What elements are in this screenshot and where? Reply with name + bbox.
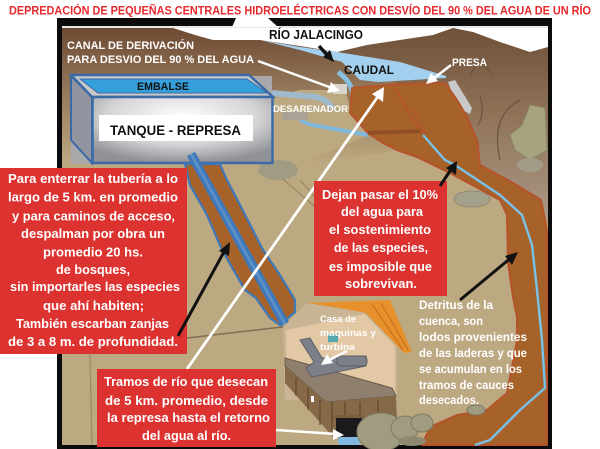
arrow: canal (258, 61, 340, 93)
label: casa de maquinas (320, 314, 376, 352)
label: canal de derivacion (67, 39, 254, 66)
embalse label: EMBALSE (137, 81, 189, 93)
callout: trench and deforestation: promedio 20 hs. (43, 246, 143, 260)
label: rio jalacingo: RÍO JALACINGO (269, 27, 363, 42)
label: canal de derivacion: CANAL DE DERIVACIÓN (67, 39, 194, 52)
text: detritus: de las laderas y que (419, 348, 527, 360)
pipe: brown trench and penstock (185, 154, 295, 325)
callout: 10 percent water: es imposible que (329, 260, 432, 274)
powerhouse (283, 300, 485, 449)
arrow: presa (426, 65, 451, 84)
label: casa de maquinas: maquinas y (320, 328, 376, 338)
text: detritus: cuenca, son (419, 316, 483, 328)
arrow: to detritus channel (460, 252, 518, 300)
river water: caudal (260, 40, 446, 82)
arrow: to thin water (440, 161, 457, 186)
arrow: black to trench (178, 242, 230, 336)
callout: 10 percent water: Dejan pasar el 10% (322, 188, 438, 202)
text: detritus: lodos provenientes (419, 332, 527, 344)
text: detritus: Detritus de la (419, 300, 494, 312)
label: presa: PRESA (452, 57, 487, 69)
label: desarenador: DESARENADOR (273, 104, 348, 115)
callout: trench and deforestation: de bosques, (56, 263, 130, 277)
callout: 10 percent water (314, 181, 447, 296)
callout: 10 percent water: de las especies, (334, 241, 428, 255)
callout: 10 percent water: el sostenimiento (329, 223, 431, 237)
callout: dried river sections (97, 369, 276, 447)
label: caudal: CAUDAL (344, 63, 394, 77)
callout: dried river sections: Tramos de río que desecan (104, 375, 268, 389)
tank label: TANQUE - REPRESA (110, 123, 241, 138)
callout: trench and deforestation: Para enterrar la tubería a lo (8, 172, 178, 186)
arrow: long white line to dam (187, 87, 384, 369)
callout: 10 percent water: sobrevivan. (345, 277, 417, 291)
storage tank: embalse (71, 75, 273, 164)
callout: dried river sections: del agua al río. (142, 429, 231, 443)
arrow: rio flow (319, 46, 334, 62)
callout: trench and deforestation (0, 168, 187, 354)
arrow: water return (276, 429, 344, 440)
text: detritus: desecados. (419, 395, 479, 407)
callout: trench and deforestation: de 3 a 8 m. de profundidad. (8, 335, 178, 349)
arrow: casa (321, 351, 347, 365)
illustration: landscape frame (57, 18, 552, 449)
label: casa de maquinas: Casa de (320, 314, 356, 324)
callout: trench and deforestation: largo de 5 km. en promedio (8, 190, 178, 204)
label: canal de derivacion: PARA DESVIO DEL 90 % DEL AGUA (67, 54, 254, 66)
callout: trench and deforestation: También escarban zanjas (16, 317, 169, 331)
callout: dried river sections: de 5 km. promedio, desde (105, 394, 268, 408)
text: detritus: tramos de cauces (419, 380, 514, 392)
dried river channel and dam (350, 83, 547, 445)
callout: 10 percent water: del agua para (341, 205, 424, 219)
text: detritus: se acumulan en los (419, 364, 522, 376)
desarenador and canal (272, 72, 472, 135)
callout: trench and deforestation: sin importarles las especies (10, 280, 180, 294)
callout: trench and deforestation: despalman por obra un (21, 227, 165, 241)
tank label (99, 115, 253, 141)
callout: trench and deforestation: y para caminos de acceso, (12, 210, 175, 224)
callout: trench and deforestation: que ahí habiten; (43, 299, 144, 313)
callout: dried river sections: la represa hasta el retorno (107, 411, 270, 425)
label: casa de maquinas: turbina (320, 342, 356, 352)
text: detritus (419, 300, 527, 407)
